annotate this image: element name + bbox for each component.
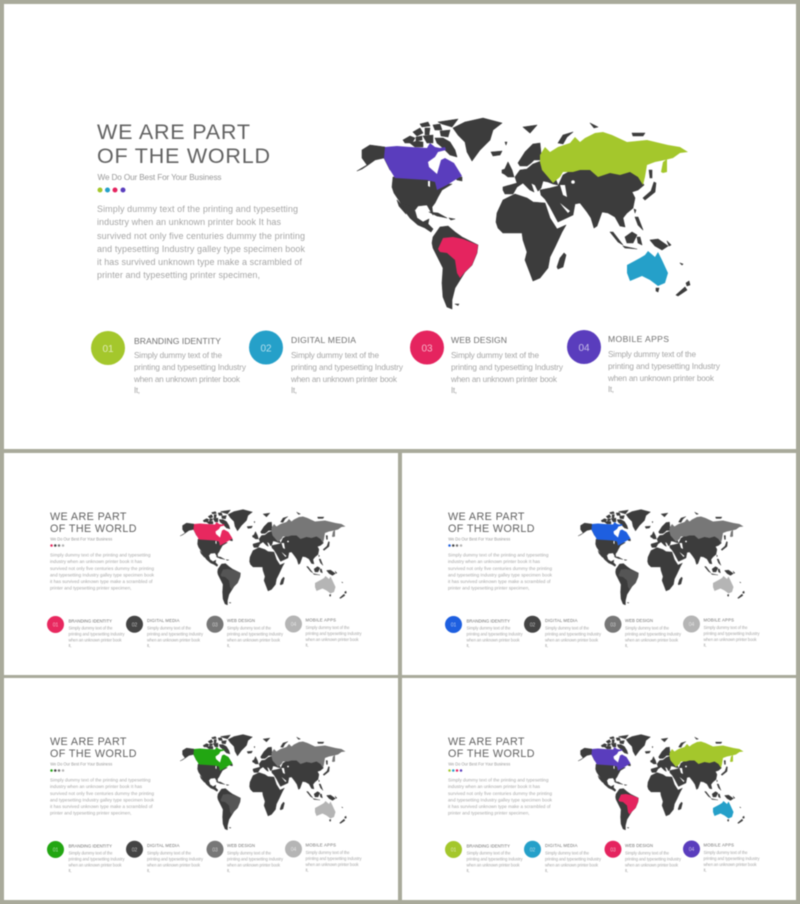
item 03: 03 xyxy=(610,622,616,628)
item 02: DIGITAL MEDIA xyxy=(147,843,180,848)
intro text: printer and typesetting printer specimen, xyxy=(50,810,132,816)
item 02: Simply dummy text of the xyxy=(545,850,590,856)
item 04 mobile apps xyxy=(567,330,721,394)
item 03 web design: when an unknown printer book xyxy=(450,375,558,384)
item 01: when an unknown printer book xyxy=(68,638,122,642)
item 04: MOBILE APPS xyxy=(306,842,336,848)
item 03: 03 xyxy=(610,847,616,853)
item 02: when an unknown printer book xyxy=(147,638,201,642)
item 03: printing and typesetting Industry xyxy=(625,632,682,636)
dots xyxy=(50,769,64,772)
intro text: survived not only five centuries dummy the printing xyxy=(448,791,552,796)
title xyxy=(97,120,270,168)
item 04: MOBILE APPS xyxy=(704,842,734,848)
item 02: Simply dummy text of the xyxy=(545,626,590,630)
item 04: It, xyxy=(306,868,308,872)
intro text: industry when an unknown printer book It has xyxy=(50,784,143,789)
item 03 web design: It, xyxy=(451,386,457,395)
item 02 digital media: when an unknown printer book xyxy=(290,375,398,384)
subtitle: We Do Our Best For Your Business xyxy=(448,762,510,766)
intro text: and typesetting Industry galley type specimen book xyxy=(97,244,306,254)
item 04 mobile apps: Simply dummy text of the xyxy=(608,350,696,359)
intro text: survived not only five centuries dummy the printing xyxy=(97,231,305,241)
item 04 xyxy=(285,840,362,872)
intro text: and typesetting Industry galley type specimen book xyxy=(50,798,155,802)
item 03: It, xyxy=(625,643,628,648)
intro text: industry when an unknown printer book It has xyxy=(448,784,541,789)
title: WE ARE PART xyxy=(50,511,127,523)
item 02: printing and typesetting Industry xyxy=(545,632,602,636)
item 03: Simply dummy text of the xyxy=(625,626,670,630)
item 04: 04 xyxy=(291,622,296,628)
intro text: and typesetting Industry galley type specimen book xyxy=(448,798,553,802)
item 03: printing and typesetting Industry xyxy=(227,856,284,862)
item 04: Simply dummy text of the xyxy=(704,625,748,630)
item 01: printing and typesetting Industry xyxy=(466,632,523,636)
intro text: Simply dummy text of the printing and typesetting xyxy=(97,204,298,214)
item 03 xyxy=(206,841,284,873)
item 02: 02 xyxy=(132,847,137,853)
item 02: DIGITAL MEDIA xyxy=(147,618,180,623)
item 01: printing and typesetting Industry xyxy=(68,856,125,862)
intro text: Simply dummy text of the printing and typesetting xyxy=(50,552,151,558)
item 02 digital media: Simply dummy text of the xyxy=(291,351,379,360)
item 02: DIGITAL MEDIA xyxy=(545,843,578,848)
title: OF THE WORLD xyxy=(50,523,137,535)
item 03: WEB DESIGN xyxy=(227,618,255,623)
item 01 xyxy=(445,841,523,873)
item 02: 02 xyxy=(132,622,137,628)
intro text: printer and typesetting printer specimen, xyxy=(97,270,260,280)
item 02 digital media: 02 xyxy=(260,344,272,354)
intro text: it has survived unknown type make a scrambled of xyxy=(448,804,551,809)
intro text: it has survived unknown type make a scrambled of xyxy=(50,579,153,584)
title: WE ARE PART xyxy=(97,120,250,144)
world map xyxy=(180,510,346,605)
item 03: when an unknown printer book xyxy=(227,862,281,868)
item 04 xyxy=(683,616,760,648)
item 01: Simply dummy text of the xyxy=(466,850,511,856)
item 04 xyxy=(683,840,760,872)
item 04: MOBILE APPS xyxy=(704,618,734,622)
intro text: industry when an unknown printer book It has xyxy=(448,559,541,564)
item 01: BRANDING IDENTITY xyxy=(466,844,510,848)
intro text: and typesetting Industry galley type specimen book xyxy=(50,572,155,578)
item 03: Simply dummy text of the xyxy=(625,850,670,856)
item 04 mobile apps: printing and typesetting Industry xyxy=(608,362,721,371)
item 01: BRANDING IDENTITY xyxy=(466,618,510,624)
item 01 branding identity: Simply dummy text of the xyxy=(134,351,222,360)
item 04: 04 xyxy=(689,847,694,853)
item 03: 03 xyxy=(212,622,218,628)
intro text: industry when an unknown printer book It has xyxy=(97,217,282,227)
intro text: Simply dummy text of the printing and typesetting xyxy=(448,552,549,558)
item 04 mobile apps: when an unknown printer book xyxy=(607,374,715,383)
item 03 web design: WEB DESIGN xyxy=(451,335,507,345)
item 03 web design: 03 xyxy=(421,344,433,354)
dots xyxy=(448,544,462,547)
intro text xyxy=(97,204,306,280)
item 02: It, xyxy=(545,868,548,873)
item 02: printing and typesetting Industry xyxy=(545,856,602,862)
item 01 xyxy=(445,616,523,648)
item 04: printing and typesetting Industry xyxy=(704,631,760,636)
item 01: BRANDING IDENTITY xyxy=(68,844,112,848)
subtitle: We Do Our Best For Your Business xyxy=(448,536,510,542)
item 04: It, xyxy=(306,642,308,648)
item 01: printing and typesetting Industry xyxy=(68,632,125,636)
item 04: when an unknown printer book xyxy=(704,637,757,642)
item 03: It, xyxy=(625,868,628,873)
title: OF THE WORLD xyxy=(448,748,535,760)
item 02: 02 xyxy=(530,622,535,628)
item 02 xyxy=(126,616,204,648)
item 02 digital media: DIGITAL MEDIA xyxy=(291,335,356,345)
intro text xyxy=(50,778,155,816)
item 03: Simply dummy text of the xyxy=(227,850,272,856)
intro text: it has survived unknown type make a scrambled of xyxy=(448,579,551,584)
panel: full colour variant xyxy=(402,678,796,900)
item 03 xyxy=(604,841,682,873)
item 01: when an unknown printer book xyxy=(68,862,122,868)
item 02: Simply dummy text of the xyxy=(147,850,192,856)
item 03 web design: printing and typesetting Industry xyxy=(451,363,564,372)
item 04 mobile apps: It, xyxy=(608,385,614,394)
item 02 xyxy=(126,841,204,873)
intro text xyxy=(448,552,553,590)
title xyxy=(50,511,137,535)
intro text: Simply dummy text of the printing and typesetting xyxy=(50,778,151,782)
item 01 branding identity: It, xyxy=(134,386,140,395)
item 02 xyxy=(524,841,602,873)
item 01: 01 xyxy=(53,848,58,854)
intro text: survived not only five centuries dummy the printing xyxy=(50,566,154,571)
panel: red variant xyxy=(4,453,398,675)
item 04: 04 xyxy=(689,622,694,628)
item 04: Simply dummy text of the xyxy=(704,850,748,855)
intro text: industry when an unknown printer book It has xyxy=(50,559,143,564)
item 02: when an unknown printer book xyxy=(545,638,599,642)
item 02: when an unknown printer book xyxy=(545,862,599,868)
item 03: when an unknown printer book xyxy=(625,638,679,642)
title: OF THE WORLD xyxy=(50,748,137,760)
intro text: printer and typesetting printer specimen, xyxy=(448,810,530,816)
item 01: when an unknown printer book xyxy=(466,862,520,868)
item 03: printing and typesetting Industry xyxy=(227,632,284,636)
dots xyxy=(448,769,462,772)
intro text: it has survived unknown type make a scrambled of xyxy=(50,804,153,809)
item 03: Simply dummy text of the xyxy=(227,626,272,630)
item 01 branding identity xyxy=(91,331,247,395)
item 04: Simply dummy text of the xyxy=(306,625,350,630)
item 02: when an unknown printer book xyxy=(147,862,201,868)
intro text: printer and typesetting printer specimen, xyxy=(50,586,132,590)
item 02 digital media xyxy=(249,330,404,395)
title: WE ARE PART xyxy=(448,511,525,523)
item 04: printing and typesetting Industry xyxy=(704,856,760,861)
panel: main slide xyxy=(4,4,796,449)
item 02: It, xyxy=(147,868,150,873)
item 01: 01 xyxy=(451,848,456,854)
colour dots xyxy=(98,188,126,192)
item 01: Simply dummy text of the xyxy=(68,850,113,856)
intro text xyxy=(50,552,155,590)
item 01: BRANDING IDENTITY xyxy=(68,618,112,624)
item 03 web design: Simply dummy text of the xyxy=(451,351,539,360)
item 01: It, xyxy=(68,868,72,873)
title xyxy=(448,736,535,760)
item 01: when an unknown printer book xyxy=(466,638,520,642)
subtitle: We Do Our Best For Your Business xyxy=(50,762,112,766)
item 03 xyxy=(206,616,284,648)
item 01: It, xyxy=(466,868,470,873)
intro text: survived not only five centuries dummy the printing xyxy=(448,566,552,571)
item 01: Simply dummy text of the xyxy=(68,626,113,630)
world map xyxy=(578,734,744,830)
item 04: MOBILE APPS xyxy=(306,618,336,622)
item 03: It, xyxy=(227,868,230,873)
item 02: DIGITAL MEDIA xyxy=(545,618,578,623)
intro text: printer and typesetting printer specimen, xyxy=(448,586,530,590)
item 01 xyxy=(47,841,125,873)
item 02: Simply dummy text of the xyxy=(147,626,192,630)
item 04: when an unknown printer book xyxy=(306,862,359,867)
title: WE ARE PART xyxy=(50,736,127,748)
item 03 xyxy=(604,616,682,648)
item 01 branding identity: printing and typesetting Industry xyxy=(134,363,247,372)
subtitle: We Do Our Best For Your Business xyxy=(50,536,112,542)
item 02: 02 xyxy=(530,847,535,853)
title: OF THE WORLD xyxy=(448,523,535,535)
item 01 branding identity: when an unknown printer book xyxy=(133,375,241,384)
item 04 mobile apps: MOBILE APPS xyxy=(608,334,669,344)
item 04: It, xyxy=(704,868,706,872)
world map xyxy=(357,118,690,309)
item 02: It, xyxy=(545,643,548,648)
world map xyxy=(578,510,744,605)
item 04: printing and typesetting Industry xyxy=(306,631,362,636)
item 03: 03 xyxy=(212,847,218,853)
item 02 digital media: printing and typesetting Industry xyxy=(291,363,404,372)
item 04: Simply dummy text of the xyxy=(306,850,350,855)
item 02 xyxy=(524,616,602,648)
title xyxy=(448,511,535,535)
intro text xyxy=(448,778,553,816)
panel: green variant xyxy=(4,678,398,900)
dots xyxy=(50,544,64,547)
item 03: WEB DESIGN xyxy=(625,843,653,848)
item 02: printing and typesetting Industry xyxy=(147,856,204,862)
intro text: and typesetting Industry galley type specimen book xyxy=(448,572,553,578)
item 02 digital media: It, xyxy=(291,386,297,395)
item 01: It, xyxy=(68,643,72,648)
item 04 xyxy=(285,616,362,648)
item 03 web design xyxy=(410,330,564,395)
title xyxy=(50,736,137,760)
item 01 branding identity: 01 xyxy=(102,344,114,355)
intro text: it has survived unknown type make a scrambled of xyxy=(97,257,302,267)
subtitle: We Do Our Best For Your Business xyxy=(98,173,222,182)
item 01: 01 xyxy=(53,622,58,628)
item 02: printing and typesetting Industry xyxy=(147,632,204,636)
item 01: printing and typesetting Industry xyxy=(466,856,523,862)
item 04 mobile apps: 04 xyxy=(578,343,590,354)
item 01 branding identity: BRANDING IDENTITY xyxy=(134,336,221,346)
item 04: It, xyxy=(704,642,706,648)
title: OF THE WORLD xyxy=(97,144,270,168)
item 03: printing and typesetting Industry xyxy=(625,856,682,862)
item 04: 04 xyxy=(291,847,296,853)
item 01 xyxy=(47,616,125,648)
item 01: It, xyxy=(466,643,470,648)
item 04: printing and typesetting Industry xyxy=(306,856,362,861)
item 03: when an unknown printer book xyxy=(625,862,679,868)
item 04: when an unknown printer book xyxy=(704,862,757,867)
intro text: survived not only five centuries dummy the printing xyxy=(50,791,154,796)
panel: blue variant xyxy=(402,453,796,675)
world map xyxy=(180,734,346,830)
item 01: 01 xyxy=(451,622,456,628)
item 03: It, xyxy=(227,643,230,648)
intro text: Simply dummy text of the printing and typesetting xyxy=(448,778,549,782)
item 03: when an unknown printer book xyxy=(227,638,281,642)
item 04: when an unknown printer book xyxy=(306,637,359,642)
item 03: WEB DESIGN xyxy=(625,618,653,623)
item 03: WEB DESIGN xyxy=(227,843,255,848)
title: WE ARE PART xyxy=(448,736,525,748)
item 01: Simply dummy text of the xyxy=(466,626,511,630)
item 02: It, xyxy=(147,643,150,648)
